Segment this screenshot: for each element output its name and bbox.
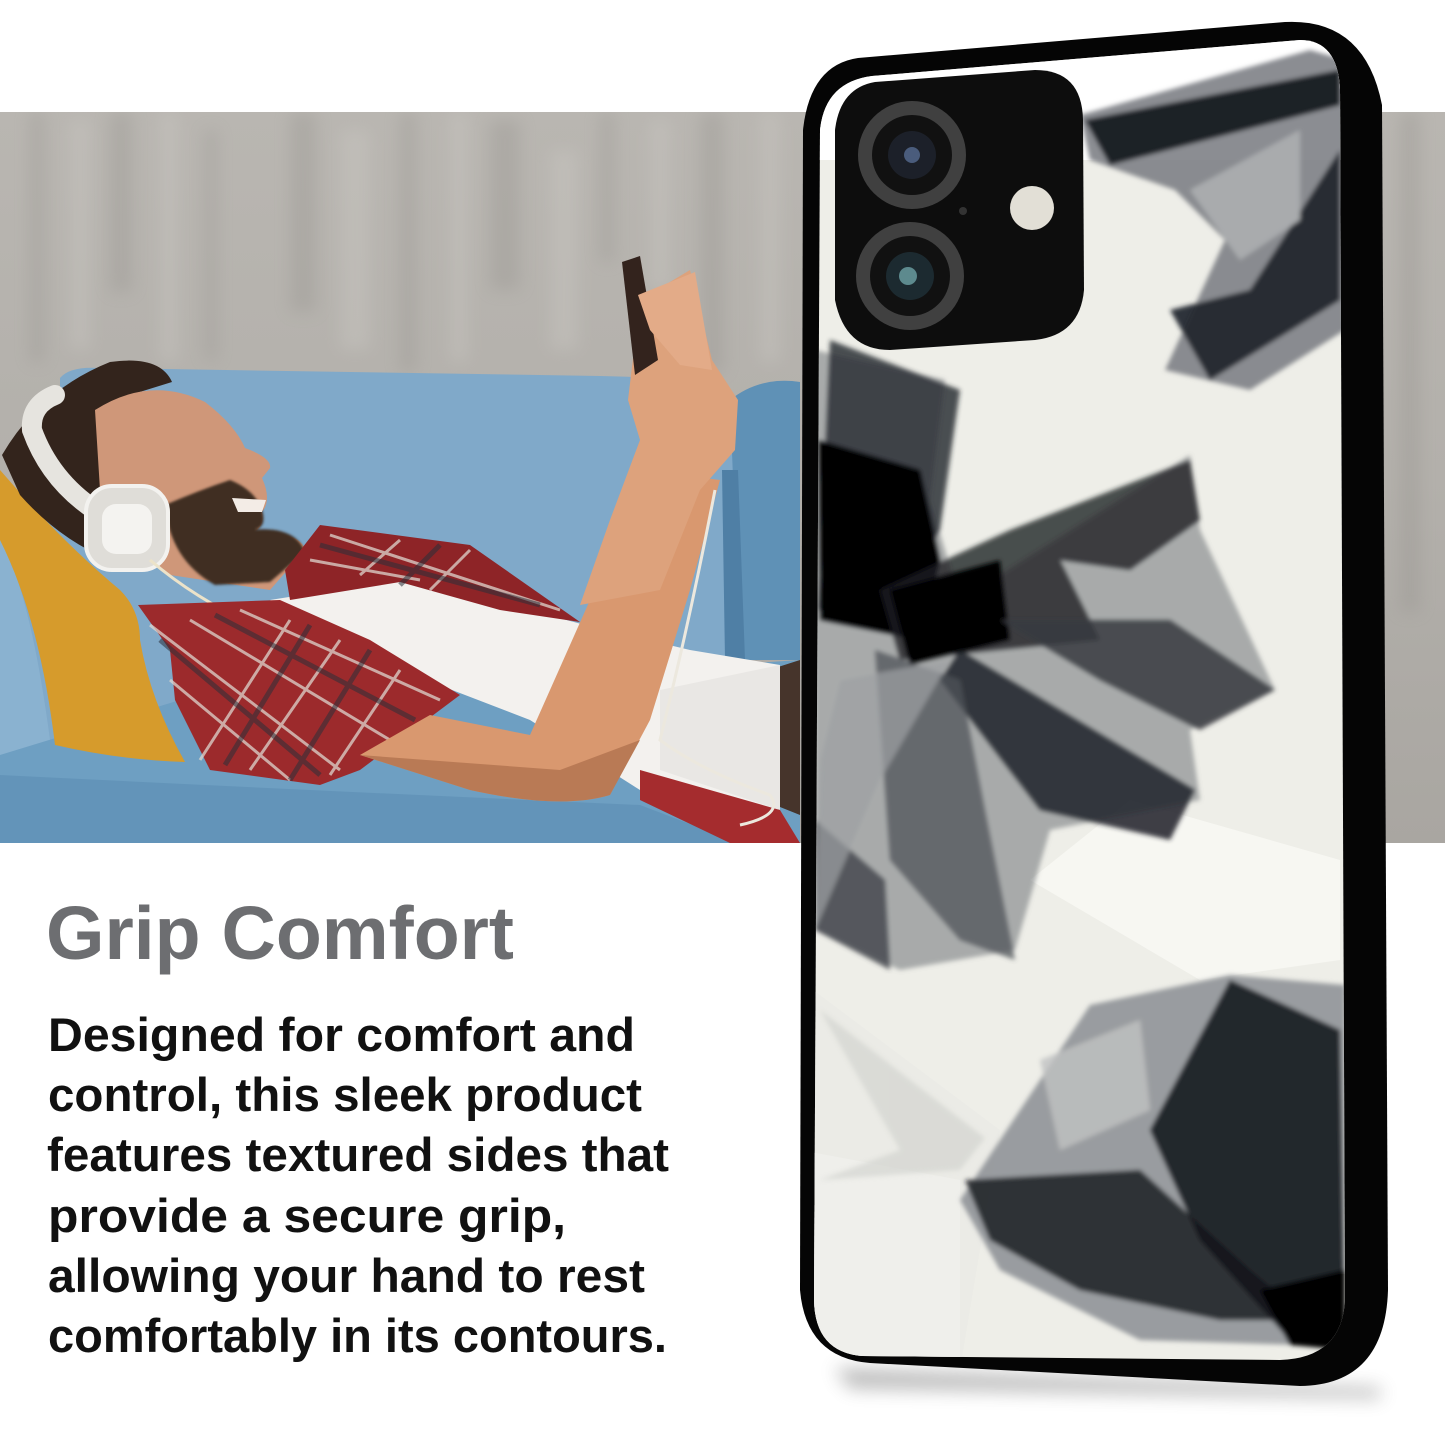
microphone [959,207,967,215]
upper lens [858,101,966,209]
body text: provide a secure grip, [48,1189,566,1242]
earphone cable [660,490,774,825]
phone case [800,22,1388,1386]
screen artwork [800,30,1360,1370]
phone drop shadow [835,1368,1380,1398]
pillow [0,470,185,762]
jeans and belt [780,660,800,815]
sofa [0,368,800,843]
ribbon bow bottom right [960,975,1345,1350]
ribbon bow centre [815,340,1275,970]
concrete wall [0,112,1445,843]
white t-shirt [270,578,780,815]
fingers [638,272,712,370]
lower arm [360,470,720,801]
headphones [22,385,213,602]
lower lens [856,222,964,330]
case body [800,22,1388,1386]
lifestyle photo: man on sofa [0,112,1445,843]
body text: features textured sides that [47,1128,669,1181]
body text: Designed for comfort and [48,1008,635,1061]
plaid shirt [138,525,800,843]
white flower bottom left [820,1010,985,1180]
face and neck [95,390,305,590]
ribbon bow top right [1080,50,1345,390]
upper arm and hand [580,270,738,605]
body text [47,1008,669,1362]
heading: Grip Comfort [46,891,514,975]
body text: comfortably in its contours. [48,1309,667,1362]
beard [165,480,305,585]
hair [2,361,172,560]
held smartphone [622,256,658,375]
flash [1010,186,1054,230]
body text: allowing your hand to rest [48,1249,645,1302]
camera island [835,70,1084,350]
body text: control, this sleek product [48,1068,642,1121]
